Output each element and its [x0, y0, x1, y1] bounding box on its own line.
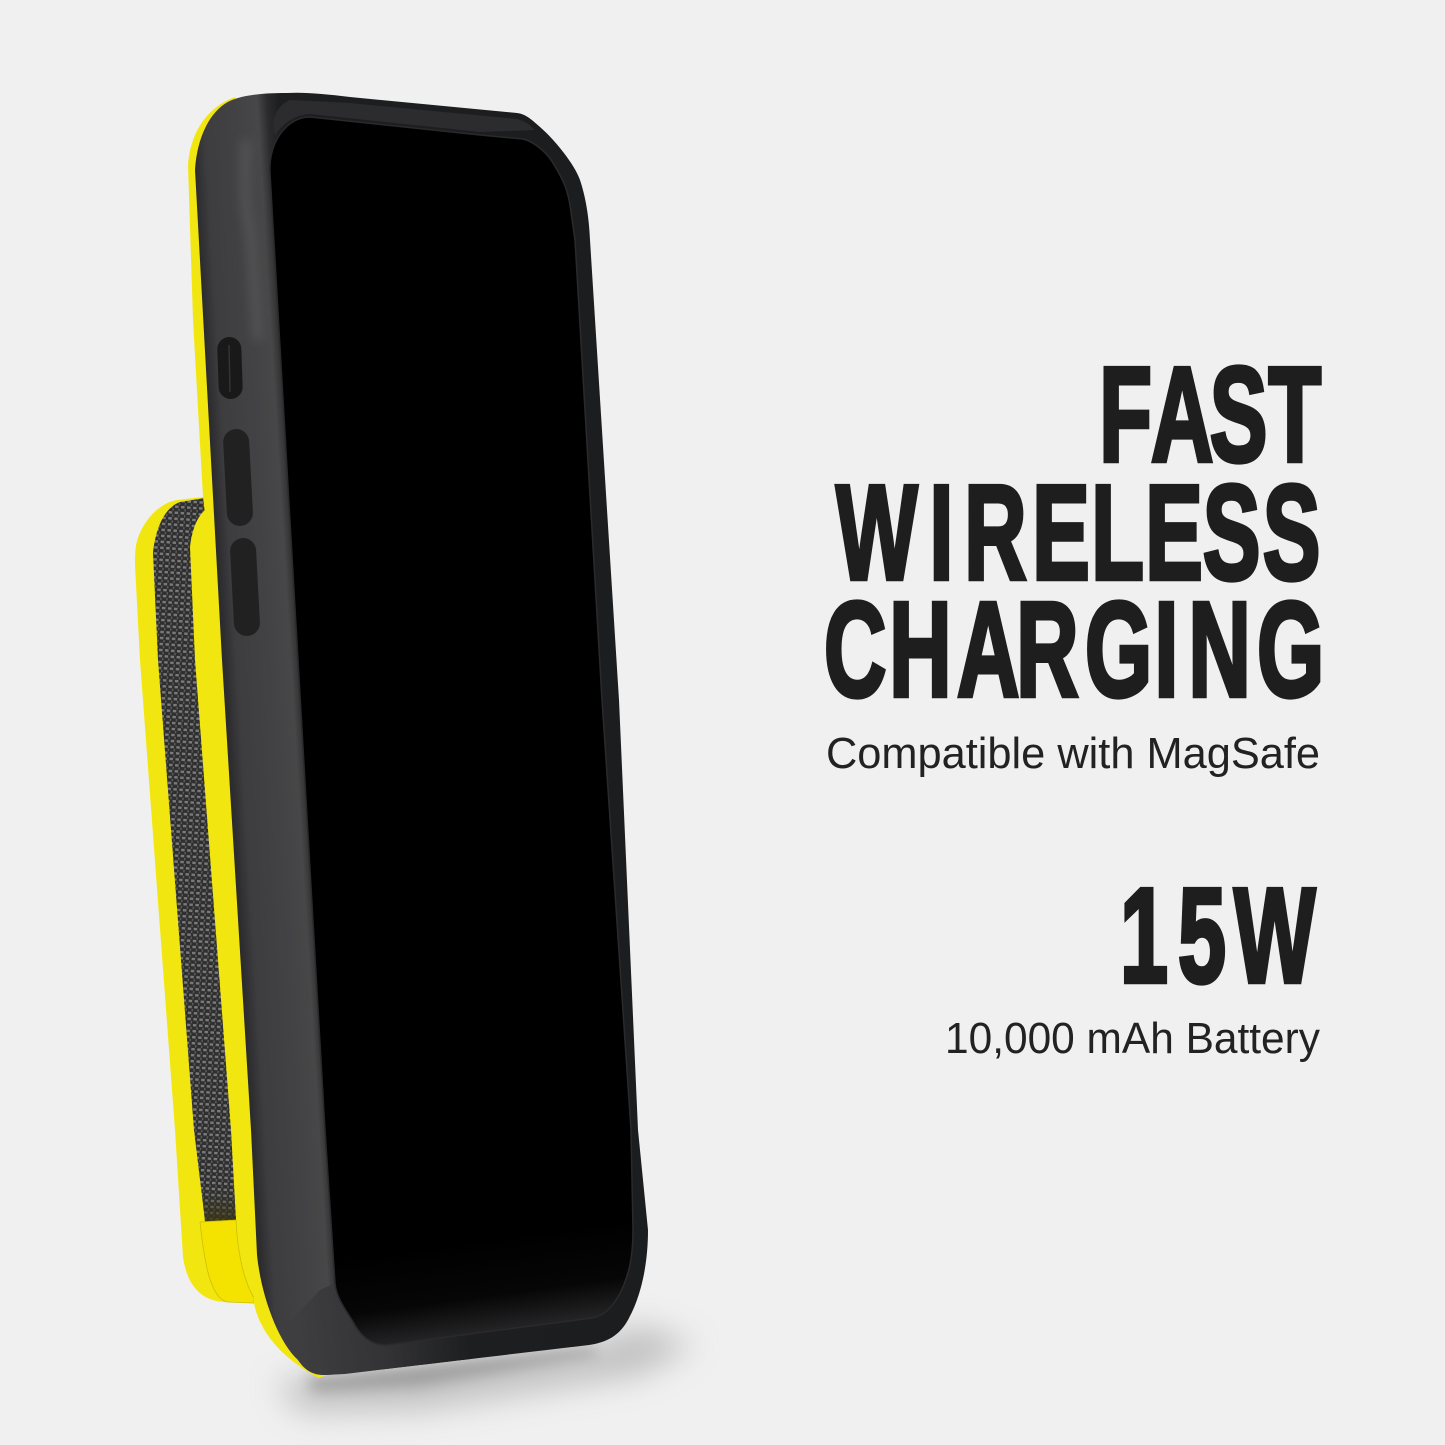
floor shadow — [275, 1325, 695, 1412]
heading: fast wireless charging — [824, 340, 1324, 726]
subheading: compatible with magsafe: Compatible with MagSafe — [826, 729, 1320, 778]
power bank lower clip — [200, 1220, 254, 1303]
volume up button — [217, 337, 243, 399]
heading: fast wireless charging: FAST — [1099, 340, 1321, 491]
stat caption: 10,000 mAh battery: 10,000 mAh Battery — [945, 1015, 1320, 1063]
top rim shading — [274, 100, 535, 135]
heading: fast wireless charging: CHARGING — [824, 575, 1324, 726]
heading: fast wireless charging: WIRELESS — [836, 458, 1320, 609]
side button lower — [229, 537, 261, 637]
phone yellow side edge — [188, 97, 340, 1378]
mesh shadow above clip — [202, 1190, 236, 1222]
power bank fabric mesh — [153, 498, 236, 1221]
phone glass screen — [270, 117, 633, 1345]
stat: 15W: 15W — [1120, 861, 1315, 1012]
side button middle — [223, 428, 254, 527]
body highlight along corner — [245, 140, 258, 340]
bottom corner shading — [282, 1283, 470, 1375]
power bank yellow shell — [135, 497, 262, 1304]
power bank — [135, 497, 262, 1304]
phone case body — [195, 93, 648, 1375]
